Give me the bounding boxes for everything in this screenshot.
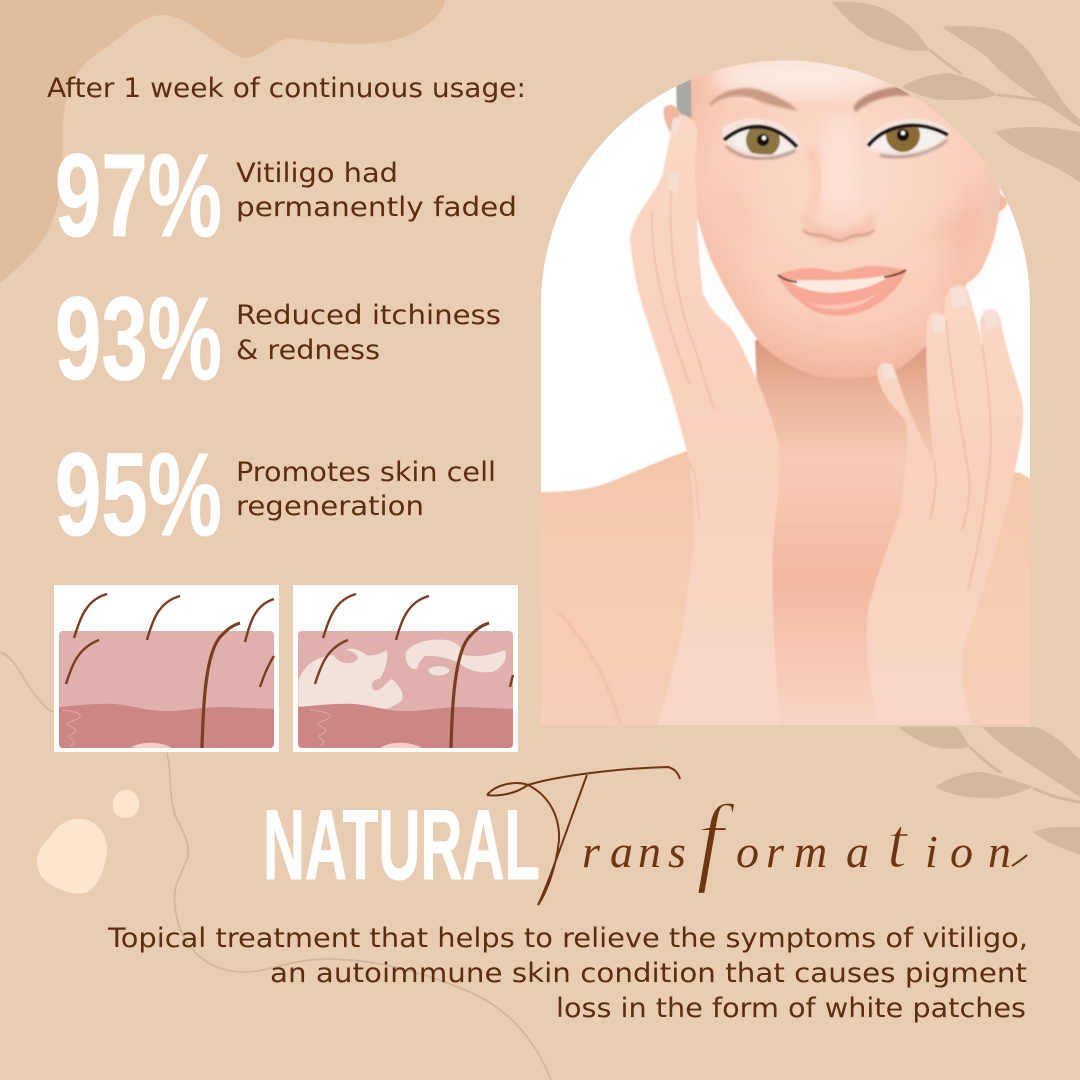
stat: 93 percent: 93% xyxy=(55,273,222,405)
stat: 95 percent: regeneration xyxy=(236,491,424,522)
title: transformation script: a xyxy=(610,826,633,877)
ear xyxy=(662,104,682,132)
title: transformation script: n xyxy=(988,826,1011,877)
title: transformation script: a xyxy=(846,826,869,877)
title: natural: NATURAL xyxy=(263,789,540,900)
neck xyxy=(755,340,945,740)
stat: 93 percent xyxy=(55,273,501,405)
hair sliver xyxy=(676,60,694,135)
blob: large cream xyxy=(37,819,107,894)
stat: 93 percent: Reduced itchiness xyxy=(236,300,501,331)
blob: small cream xyxy=(113,790,140,818)
description text: an autoimmune skin condition that causes pigment xyxy=(270,958,1027,989)
panel: healthy skin diagram xyxy=(54,585,279,752)
heading: after 1 week: After 1 week of continuous usage: xyxy=(47,73,526,104)
face xyxy=(690,40,1010,378)
face edge shade right xyxy=(986,168,1004,217)
stat: 97 percent: Vitiligo had xyxy=(236,158,398,189)
title: transformation script: o xyxy=(736,826,759,877)
stat: 97 percent: permanently faded xyxy=(236,192,517,223)
leaves: top right xyxy=(832,2,1080,182)
decorative curved line xyxy=(0,652,551,1080)
stat: 95 percent: 95% xyxy=(55,429,222,561)
script tail xyxy=(1012,855,1027,866)
forehead highlight xyxy=(710,53,890,97)
panel: vitiligo skin diagram xyxy=(293,585,518,752)
right hand and forearm xyxy=(867,284,1023,740)
stat: 97 percent xyxy=(55,130,517,262)
title: transformation script: r xyxy=(582,826,601,877)
title: transformation script: f xyxy=(696,784,736,895)
title: transformation script: n xyxy=(638,826,661,877)
photo: woman in white arch xyxy=(530,40,1040,740)
right eye xyxy=(866,118,950,157)
stat: 95 percent xyxy=(55,429,496,561)
description text xyxy=(107,923,1028,1024)
ear right xyxy=(998,194,1008,212)
stat: 93 percent: & redness xyxy=(236,335,380,366)
stat: 95 percent: Promotes skin cell xyxy=(236,457,496,488)
description text: loss in the form of white patches xyxy=(556,993,1026,1024)
right eyebrow xyxy=(853,86,912,112)
decorative blob: top left xyxy=(0,0,445,283)
leaves: bottom right xyxy=(898,727,1080,855)
title: transformation script: i xyxy=(925,826,938,877)
shoulders and chest xyxy=(530,450,1040,740)
face shadows xyxy=(732,191,986,282)
nose highlight and shadow xyxy=(802,120,875,244)
description text: Topical treatment that helps to relieve the symptoms of vitiligo, xyxy=(107,923,1028,954)
title: transformation script: m xyxy=(794,826,827,877)
left hand and forearm xyxy=(630,114,782,740)
shoulder crease xyxy=(558,612,622,725)
title: transformation script: r xyxy=(766,826,785,877)
stat: 97 percent: 97% xyxy=(55,130,222,262)
title: transformation script xyxy=(487,767,1027,905)
left eye xyxy=(722,118,800,159)
title: transformation script: o xyxy=(950,826,973,877)
left eyebrow xyxy=(709,88,798,111)
lips xyxy=(777,266,907,316)
decorative dots xyxy=(37,790,140,894)
title: transformation script: t xyxy=(887,803,909,883)
title: transformation script: s xyxy=(668,826,686,877)
